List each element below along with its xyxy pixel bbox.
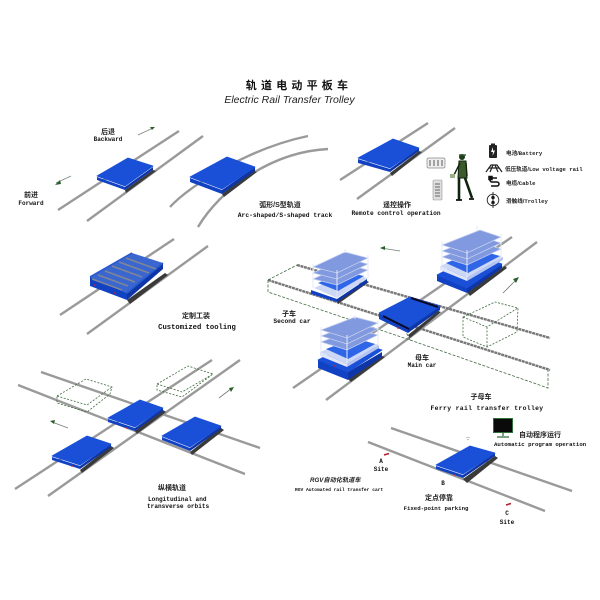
icon: remote (433, 180, 442, 200)
main car (379, 297, 441, 338)
legend labels: 低压轨道/Low voltage rail (505, 165, 583, 173)
trolley c (52, 436, 114, 473)
panel: forward and backward (18, 127, 203, 221)
label: longitudinal (147, 483, 210, 510)
icon: roller trolley (90, 253, 168, 304)
trolley (436, 446, 498, 483)
legend labels: 电池/Battery (506, 149, 543, 157)
label: arc track (238, 200, 332, 219)
label: backward: 后退 (101, 127, 115, 136)
arrow (219, 387, 234, 398)
dashed box (463, 302, 518, 347)
label: main car: 母车 (415, 353, 429, 362)
icon: battery (489, 144, 497, 158)
label: automatic program: Automatic program operation (494, 441, 587, 448)
panel: customized tooling (60, 239, 236, 334)
icon: trolley (190, 157, 257, 197)
stacked main car lower (318, 315, 385, 382)
label: customized tooling: Customized tooling (158, 324, 236, 332)
icon: cable (489, 176, 499, 186)
label: ferry rail: 子母车 (470, 392, 492, 401)
icon: receiver (427, 158, 445, 168)
label: fixed-point parking: 定点停靠 (425, 493, 453, 502)
trolley a (108, 400, 166, 434)
label: ferry rail: Ferry rail transfer trolley (430, 405, 544, 412)
panel: fixed-point parking (295, 418, 587, 526)
title: Electric Rail Transfer Trolley (224, 94, 355, 106)
site marker a (384, 454, 389, 455)
icon: worker (450, 154, 474, 200)
label: longitudinal: Longitudinal and (148, 496, 207, 503)
icon: trolley (97, 158, 156, 193)
dashed boxes (57, 379, 112, 412)
panel: remote control (340, 123, 583, 217)
label: rgv cart: RGV Automated rail transfer cart (295, 487, 383, 493)
icon: trolley line (487, 192, 499, 208)
arrow (380, 246, 400, 251)
label: backward: Backward (94, 136, 123, 143)
label: customized tooling: 定制工装 (182, 311, 210, 320)
label: automatic program (494, 430, 587, 448)
legend labels: 电缆/Cable (506, 179, 536, 187)
label: site a: Site (374, 466, 389, 473)
label: automatic program: 自动程序运行 (519, 430, 561, 439)
trolley b (162, 417, 224, 455)
label: b: B (441, 480, 445, 487)
label: remote control: Remote control operation (351, 210, 441, 217)
label: site a: A (379, 458, 383, 465)
label: second car: 子车 (282, 309, 296, 318)
site marker c (506, 504, 511, 505)
label: arc track: Arc-shaped/S-shaped track (238, 212, 332, 219)
title (224, 78, 355, 106)
panel: longitudinal and transverse (15, 360, 260, 510)
icon: monitor (494, 418, 512, 437)
legend labels (505, 149, 583, 205)
arrow (50, 420, 68, 428)
label: remote control: 遥控操作 (383, 200, 411, 209)
stacked second car right (437, 226, 507, 296)
panel: arc track (170, 136, 332, 227)
label: rgv cart: RGV自动化轨道车 (310, 476, 361, 484)
panel: ferry rail (268, 226, 550, 412)
arrow: backward (138, 127, 155, 135)
label: main car (408, 353, 437, 369)
label: second car: Second car (273, 318, 311, 325)
label: fixed-point parking (404, 493, 469, 512)
label: ferry rail (430, 392, 544, 412)
label: backward (94, 127, 123, 143)
label: rgv cart (295, 476, 383, 493)
stacked second car left (311, 249, 369, 304)
arrow: forward (55, 176, 71, 185)
label: site c: Site (500, 519, 515, 526)
label: longitudinal: transverse orbits (147, 503, 210, 510)
icon: low voltage rail (486, 165, 502, 172)
icon: trolley (358, 139, 422, 176)
label: main car: Main car (408, 362, 437, 369)
label: site a (374, 458, 389, 473)
label: fixed-point parking: Fixed-point parking (404, 505, 469, 512)
title: 轨道电动平板车 (246, 78, 352, 92)
label: site c: C (505, 510, 509, 517)
label: customized tooling (158, 311, 236, 332)
legend labels: 滑触线/Trolley (506, 197, 548, 205)
label: forward: 前进 (24, 190, 38, 199)
label: forward (18, 190, 44, 207)
label: second car (273, 309, 311, 325)
label: remote control (351, 200, 441, 217)
icon: wifi (466, 437, 470, 440)
label: longitudinal: 纵横轨道 (158, 483, 186, 492)
label: forward: Forward (18, 200, 44, 207)
label: arc track: 弧形/S型轨道 (259, 200, 301, 209)
label: site c (500, 510, 515, 526)
arrow (503, 277, 519, 293)
